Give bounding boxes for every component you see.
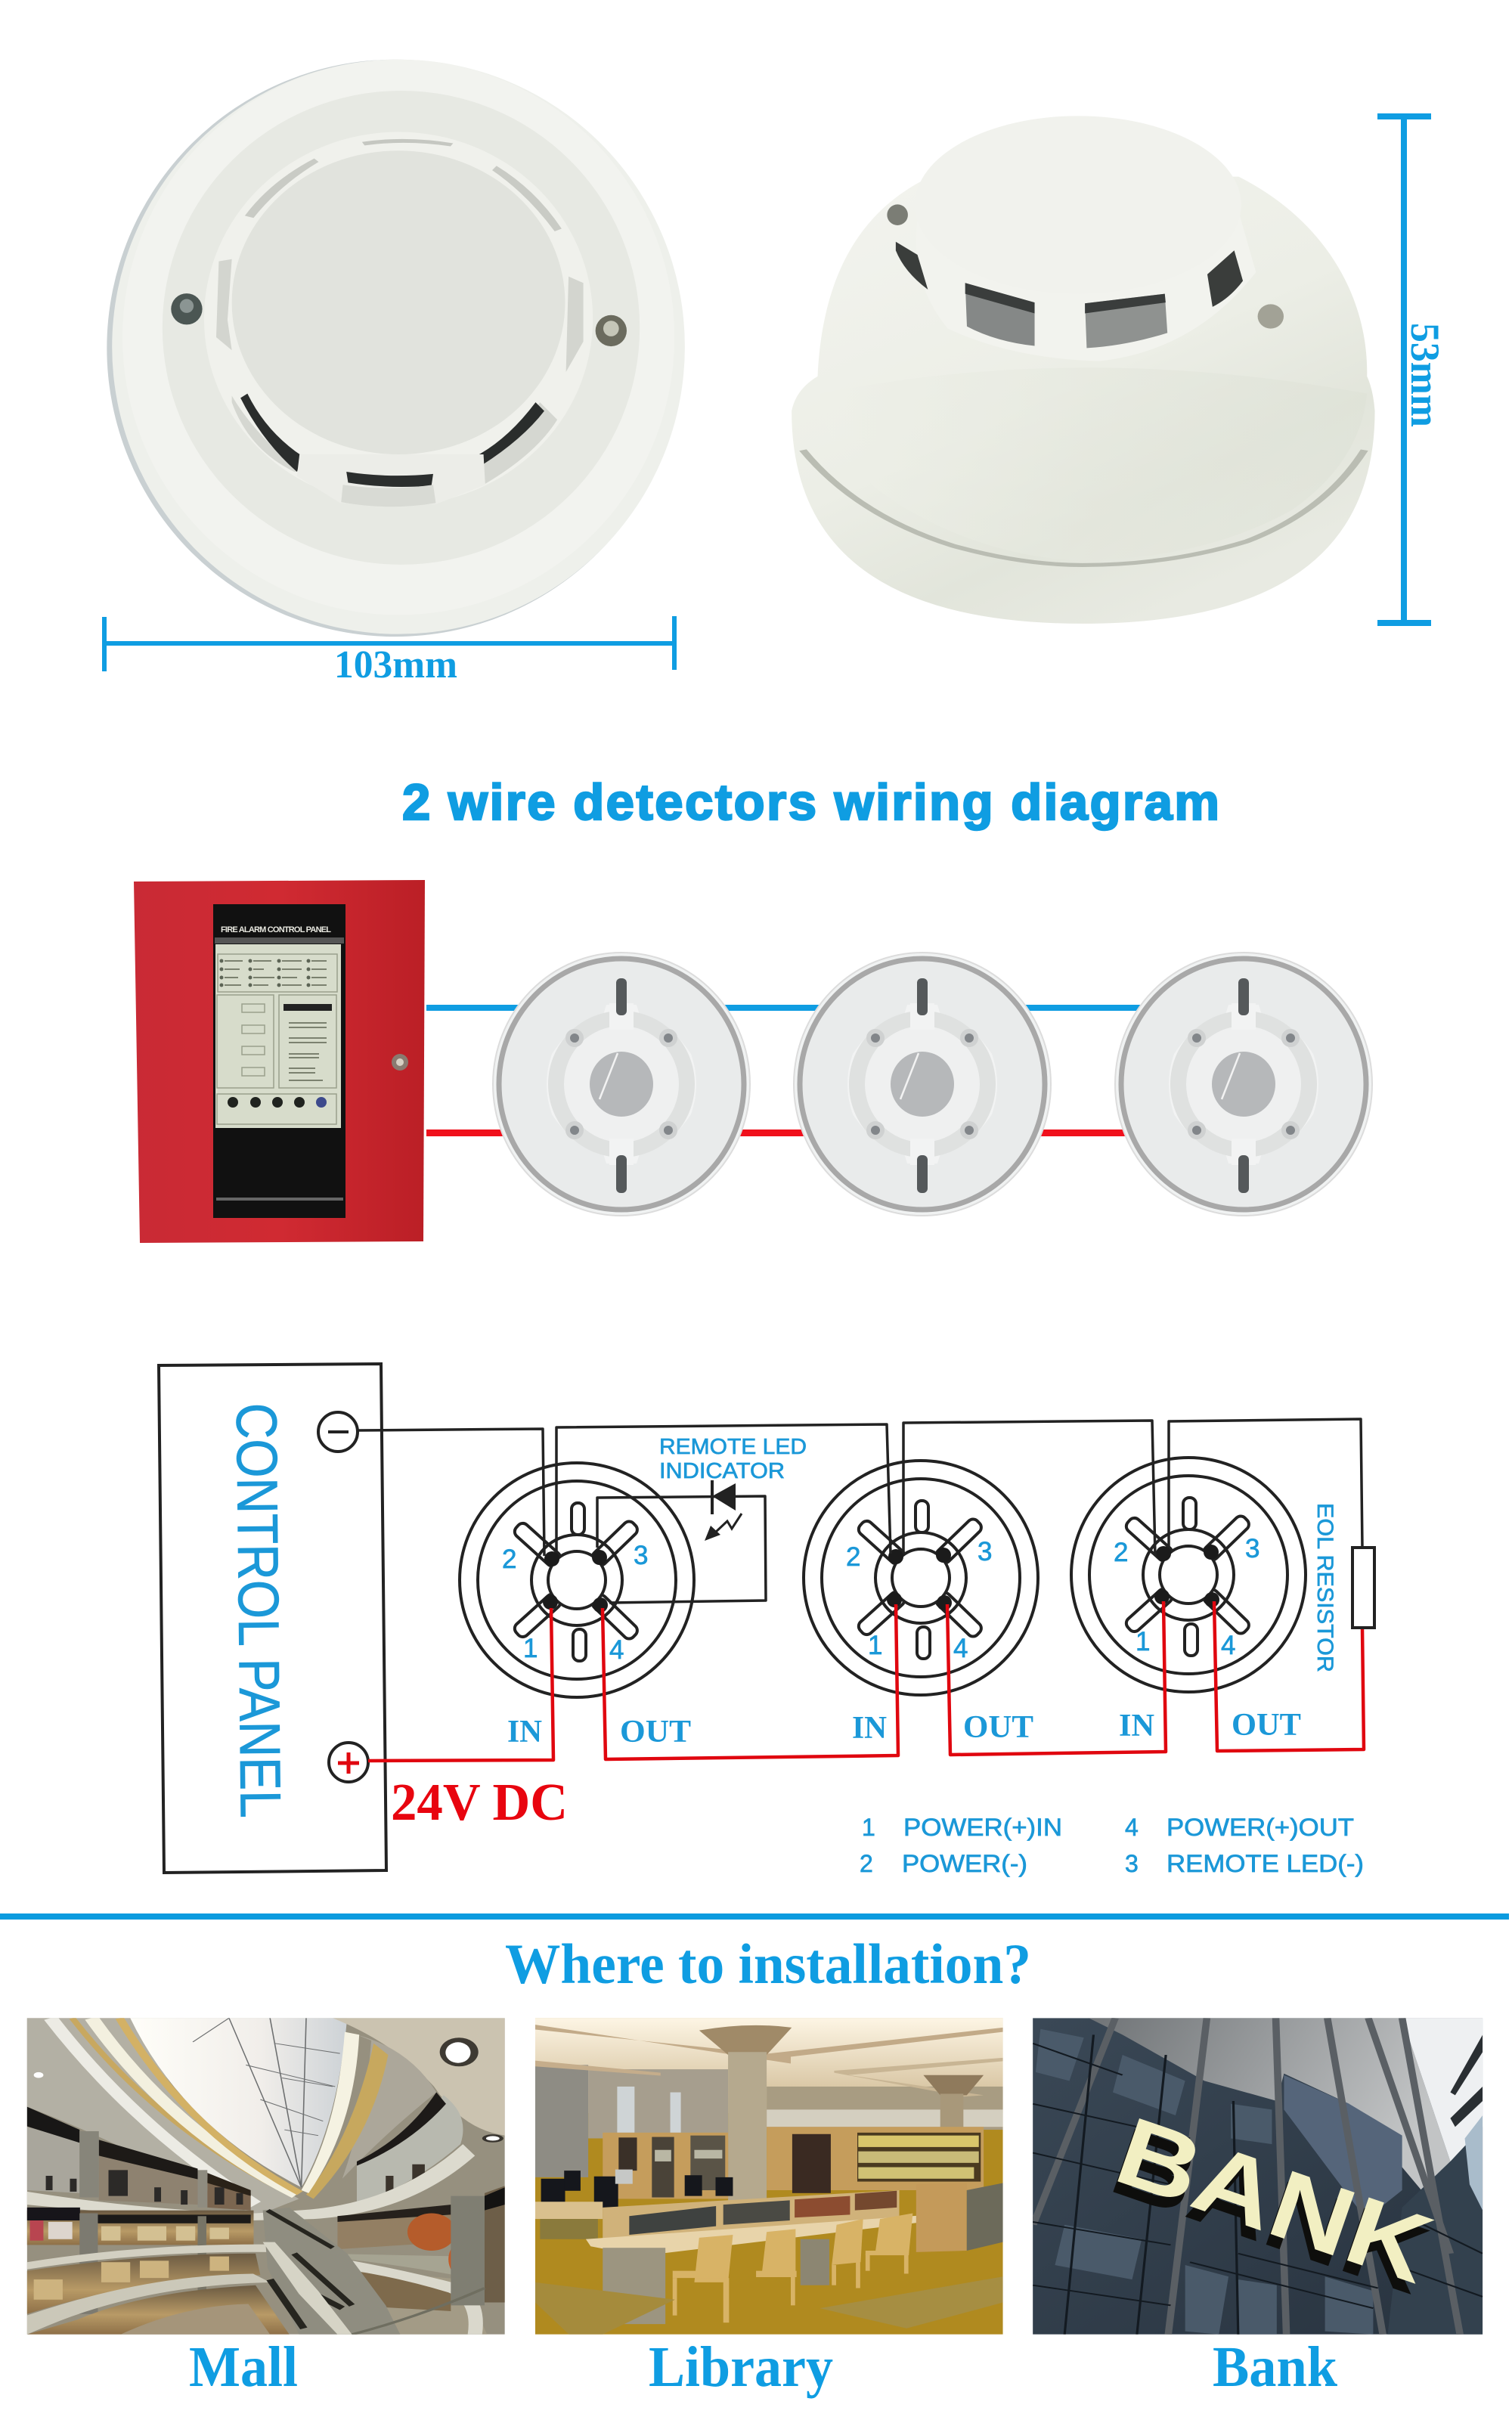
legend: terminal numbers: 3 bbox=[1125, 1850, 1139, 1877]
legend: terminal numbers: POWER(+)IN bbox=[903, 1814, 1062, 1841]
schematic: detector socket 2: 1 bbox=[868, 1631, 882, 1660]
label: remote LED indicator bbox=[659, 1435, 807, 1483]
photo: library interior bbox=[535, 2018, 1003, 2335]
schematic: EOL resistor bbox=[1352, 1548, 1374, 1628]
wires: blue and red loop lines bbox=[426, 1005, 1145, 1136]
schematic: remote LED circuit bbox=[597, 1480, 766, 1603]
labels: IN and OUT: OUT bbox=[620, 1715, 691, 1749]
heading: wiring diagram title: 2 wire detectors wiring diagram bbox=[402, 774, 1219, 831]
caption: Mall: Mall bbox=[189, 2335, 298, 2399]
labels: IN and OUT: IN bbox=[1119, 1709, 1154, 1743]
photo: red fire alarm control panel bbox=[134, 880, 425, 1243]
schematic: detector socket 2 bbox=[804, 1461, 1038, 1695]
schematic: detector socket 1 bbox=[460, 1463, 694, 1697]
labels: IN and OUT: OUT bbox=[1232, 1708, 1301, 1743]
label: remote LED indicator: REMOTE LED bbox=[659, 1435, 807, 1459]
legend: terminal numbers: REMOTE LED(-) bbox=[1167, 1850, 1364, 1877]
schematic: detector socket 1: 4 bbox=[609, 1635, 624, 1665]
schematic: detector socket 1: 1 bbox=[523, 1634, 538, 1663]
schematic: red positive wires bbox=[368, 1601, 1364, 1761]
schematic: detector socket 3: 2 bbox=[1114, 1538, 1128, 1567]
photo: detector base 3 bbox=[1115, 953, 1372, 1216]
photo: bank building: BANK bbox=[1099, 2107, 1440, 2315]
legend: terminal numbers bbox=[860, 1814, 1364, 1877]
dimension: 53mm height bbox=[1377, 116, 1448, 623]
label: 24V DC: 24V DC bbox=[391, 1774, 568, 1832]
legend: terminal numbers: 2 bbox=[860, 1850, 873, 1877]
photo: smoke detector top view bbox=[107, 60, 685, 637]
photo: detector base 1 bbox=[493, 953, 750, 1216]
schematic: negative terminal bbox=[318, 1412, 358, 1452]
photo: smoke detector side view bbox=[792, 116, 1375, 624]
schematic: control panel box: CONTROL PANEL bbox=[224, 1402, 293, 1818]
caption: Library: Library bbox=[649, 2335, 833, 2399]
legend: terminal numbers: POWER(-) bbox=[902, 1850, 1027, 1877]
schematic: positive terminal bbox=[329, 1743, 368, 1782]
caption: Bank: Bank bbox=[1213, 2335, 1338, 2399]
labels: IN and OUT: IN bbox=[507, 1715, 542, 1749]
legend: terminal numbers: 1 bbox=[862, 1814, 875, 1841]
dimension: 103mm width: 103mm bbox=[334, 643, 457, 686]
schematic: control panel box bbox=[159, 1364, 386, 1873]
legend: terminal numbers: POWER(+)OUT bbox=[1167, 1814, 1354, 1841]
heading: where to installation: Where to installation? bbox=[505, 1933, 1031, 1996]
schematic: detector socket 3: 1 bbox=[1136, 1627, 1150, 1656]
schematic: detector socket 1: 2 bbox=[502, 1545, 516, 1574]
photo: bank building: BANK bbox=[1104, 2096, 1445, 2304]
label: remote LED indicator: INDICATOR bbox=[659, 1459, 785, 1483]
dimension: 53mm height: 53mm bbox=[1402, 323, 1448, 427]
schematic: black negative wires bbox=[358, 1419, 1362, 1556]
dimension: 103mm width bbox=[104, 616, 674, 686]
labels: IN and OUT bbox=[507, 1708, 1301, 1749]
schematic: detector socket 2: 4 bbox=[953, 1634, 968, 1663]
photo: mall interior bbox=[27, 2018, 505, 2335]
labels: IN and OUT: OUT bbox=[963, 1710, 1033, 1745]
schematic: detector socket 3: 3 bbox=[1245, 1534, 1259, 1563]
schematic: detector socket 1: 3 bbox=[634, 1541, 648, 1570]
label: EOL resistor: EOL RESISTOR bbox=[1312, 1503, 1337, 1672]
schematic: detector socket 2: 3 bbox=[978, 1537, 992, 1566]
photo: bank building bbox=[1033, 2018, 1483, 2335]
labels: IN and OUT: IN bbox=[852, 1711, 887, 1746]
schematic: detector socket 2: 2 bbox=[846, 1542, 860, 1572]
photo: detector base 2 bbox=[794, 953, 1051, 1216]
schematic: detector socket 3 bbox=[1071, 1458, 1306, 1692]
legend: terminal numbers: 4 bbox=[1125, 1814, 1139, 1841]
schematic: detector socket 3: 4 bbox=[1221, 1631, 1235, 1660]
photo: red fire alarm control panel: FIRE ALARM CONTROL PANEL bbox=[221, 925, 331, 934]
